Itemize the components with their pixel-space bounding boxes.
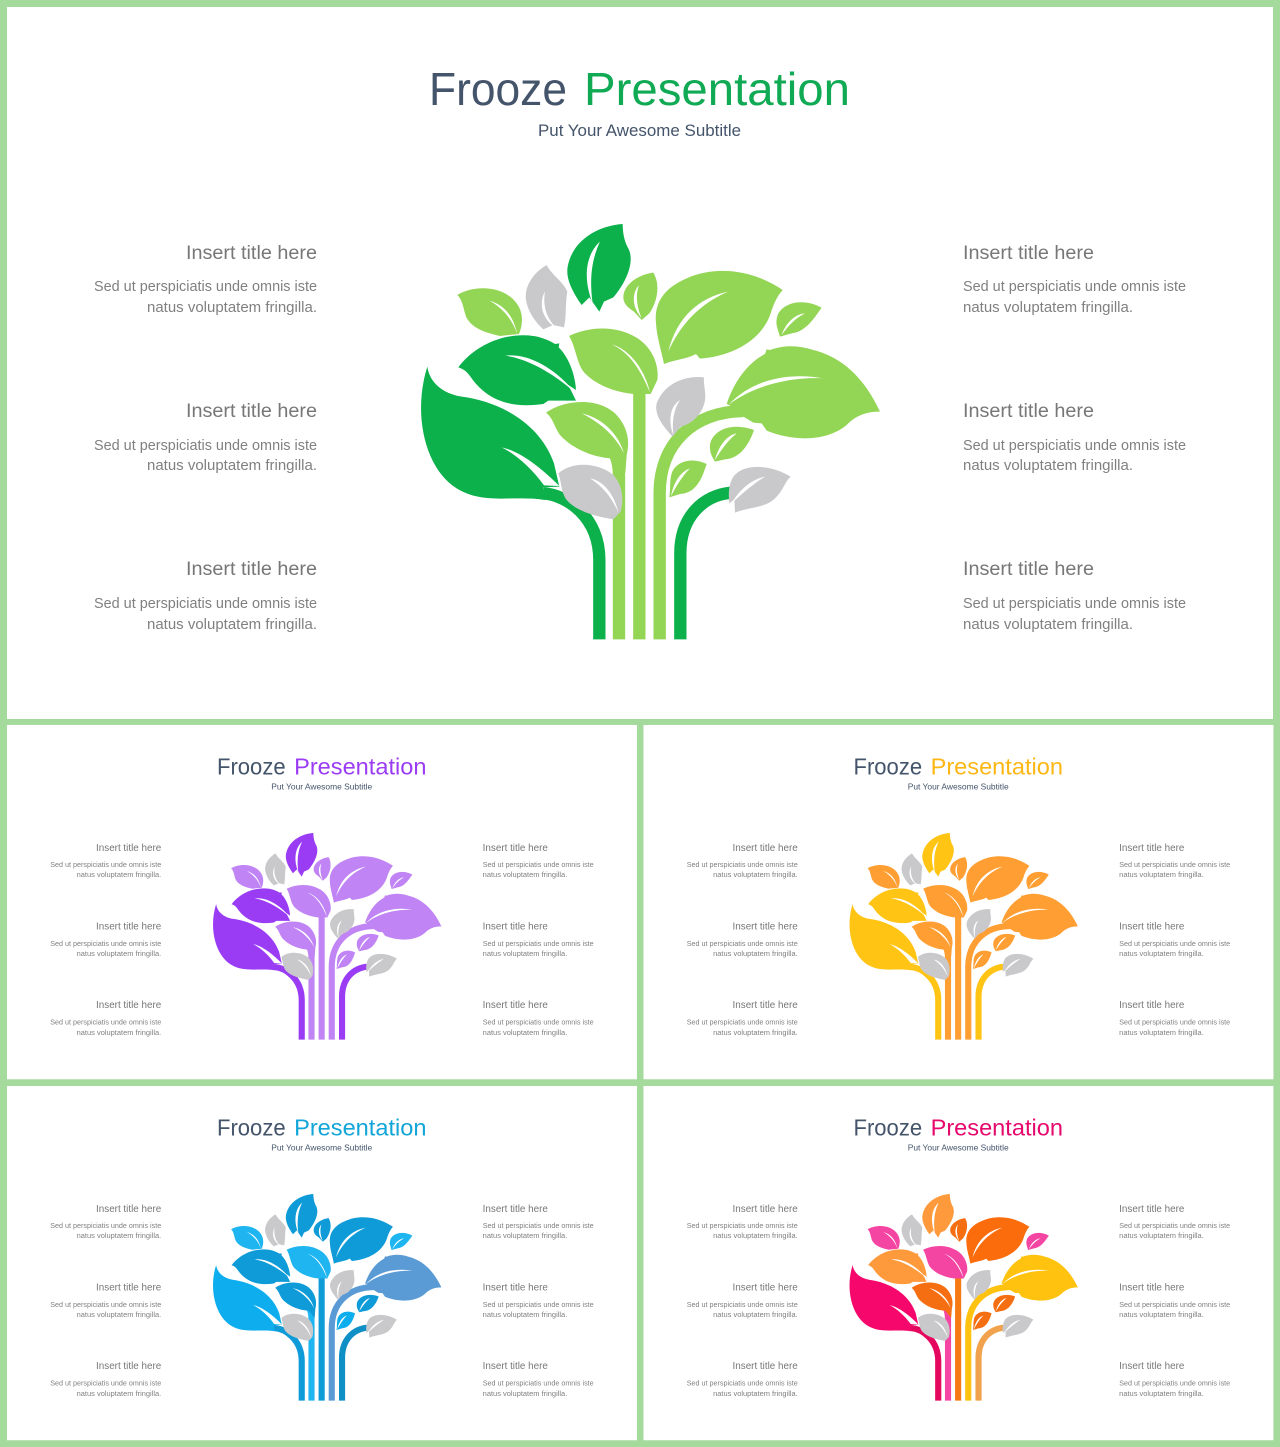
text blocks: Sed ut perspiciatis unde omnis iste	[50, 860, 161, 869]
text block: right 3	[963, 558, 1186, 633]
text blocks: Insert title here	[1119, 1204, 1184, 1215]
text blocks: Sed ut perspiciatis unde omnis iste	[483, 1300, 594, 1309]
text blocks: natus voluptatem fringilla.	[77, 949, 161, 958]
text block: right 1	[963, 242, 1186, 316]
text blocks: natus voluptatem fringilla.	[1119, 1389, 1204, 1398]
text blocks: Insert title here	[733, 843, 798, 854]
text blocks: natus voluptatem fringilla.	[483, 1310, 567, 1319]
text blocks: Insert title here	[483, 1361, 548, 1372]
leaf: light centre	[569, 328, 658, 394]
leaf: small light right	[776, 302, 822, 337]
leaf: small light top	[623, 273, 657, 320]
text blocks: Insert title here	[483, 1000, 548, 1011]
text blocks: Insert title here	[96, 1282, 161, 1293]
text blocks: natus voluptatem fringilla.	[77, 1231, 161, 1240]
panel: main green slide	[7, 7, 1273, 719]
text blocks: Sed ut perspiciatis unde omnis iste	[50, 1221, 161, 1230]
leaf: grey lower	[558, 465, 622, 519]
tree illustration: pink	[850, 1194, 1078, 1401]
leaf: big light top right	[656, 271, 783, 364]
text blocks: natus voluptatem fringilla.	[713, 870, 798, 879]
text blocks: Sed ut perspiciatis unde omnis iste	[687, 1300, 798, 1309]
text block: left 1	[94, 242, 317, 316]
leaf: top	[567, 224, 631, 312]
text blocks: natus voluptatem fringilla.	[483, 949, 567, 958]
title: Presentation	[294, 754, 426, 780]
leaf: large left	[421, 367, 559, 500]
text block: right 3: Sed ut perspiciatis unde omnis iste	[963, 596, 1186, 612]
text blocks: natus voluptatem fringilla.	[713, 1231, 798, 1240]
text blocks: Sed ut perspiciatis unde omnis iste	[483, 860, 594, 869]
title	[853, 1115, 1063, 1141]
text blocks	[50, 1204, 594, 1398]
subtitle: Put Your Awesome Subtitle	[538, 121, 741, 140]
title: Frooze	[853, 754, 922, 780]
text blocks: natus voluptatem fringilla.	[1119, 949, 1204, 958]
text blocks: Insert title here	[733, 1204, 798, 1215]
text block: left 3: Sed ut perspiciatis unde omnis iste	[94, 596, 317, 612]
text blocks: natus voluptatem fringilla.	[77, 1310, 161, 1319]
leaf: upper left	[458, 335, 576, 405]
leaf: largest right	[727, 346, 880, 438]
title	[429, 63, 850, 115]
text block: right 1: Insert title here	[963, 242, 1094, 264]
panel: purple slide	[7, 725, 637, 1079]
title	[853, 754, 1063, 780]
subtitle: Put Your Awesome Subtitle	[908, 1143, 1009, 1153]
text block: left 3	[94, 558, 317, 633]
text blocks: natus voluptatem fringilla.	[483, 1389, 567, 1398]
text blocks	[687, 1204, 1230, 1398]
text block: left 1: Insert title here	[186, 242, 317, 264]
text blocks: Sed ut perspiciatis unde omnis iste	[687, 1018, 798, 1027]
title	[217, 754, 426, 780]
text blocks: Insert title here	[1119, 843, 1184, 854]
text blocks: natus voluptatem fringilla.	[1119, 1310, 1204, 1319]
text blocks: Insert title here	[733, 1282, 798, 1293]
text blocks: Insert title here	[1119, 1000, 1184, 1011]
text blocks: natus voluptatem fringilla.	[1119, 1028, 1204, 1037]
text blocks: Sed ut perspiciatis unde omnis iste	[50, 939, 161, 948]
tree illustration: yellow	[850, 833, 1078, 1040]
text blocks: natus voluptatem fringilla.	[713, 1389, 798, 1398]
stems	[543, 387, 743, 639]
text block: right 3: Insert title here	[963, 558, 1094, 580]
leaf: small light low	[669, 460, 707, 497]
text blocks: Sed ut perspiciatis unde omnis iste	[687, 939, 798, 948]
text blocks: Insert title here	[1119, 921, 1184, 932]
text blocks: Sed ut perspiciatis unde omnis iste	[1119, 1379, 1230, 1388]
title: Presentation	[584, 63, 850, 115]
text blocks: Sed ut perspiciatis unde omnis iste	[483, 1018, 594, 1027]
panel: pink slide	[643, 1086, 1273, 1440]
text block: left 3: Insert title here	[186, 558, 317, 580]
text block: right 3: natus voluptatem fringilla.	[963, 617, 1133, 633]
text blocks: natus voluptatem fringilla.	[713, 949, 798, 958]
text blocks: natus voluptatem fringilla.	[1119, 870, 1204, 879]
text block: right 1: natus voluptatem fringilla.	[963, 300, 1133, 316]
title: Presentation	[294, 1115, 426, 1141]
text block: left 3: natus voluptatem fringilla.	[147, 617, 317, 633]
text block: left 1: Sed ut perspiciatis unde omnis iste	[94, 279, 317, 295]
title: Presentation	[931, 754, 1063, 780]
leaf: light lower centre	[546, 402, 628, 473]
text blocks: Insert title here	[733, 1361, 798, 1372]
subtitle: Put Your Awesome Subtitle	[271, 782, 373, 792]
text blocks: natus voluptatem fringilla.	[483, 1231, 567, 1240]
text blocks: Insert title here	[733, 921, 798, 932]
text block: right 2: Sed ut perspiciatis unde omnis iste	[963, 438, 1186, 454]
text blocks: Insert title here	[483, 921, 548, 932]
title: Frooze	[217, 754, 286, 780]
text block: right 2: Insert title here	[963, 400, 1094, 422]
text blocks: natus voluptatem fringilla.	[483, 1028, 567, 1037]
text blocks: Insert title here	[483, 1282, 548, 1293]
text blocks: Sed ut perspiciatis unde omnis iste	[1119, 1018, 1230, 1027]
text blocks: Insert title here	[483, 1204, 548, 1215]
subtitle: Put Your Awesome Subtitle	[271, 1143, 373, 1153]
text blocks: Sed ut perspiciatis unde omnis iste	[483, 1379, 594, 1388]
text block: left 1: natus voluptatem fringilla.	[147, 300, 317, 316]
leaf: grey top	[526, 265, 567, 329]
title: Frooze	[217, 1115, 286, 1141]
leaf: grey middle	[656, 377, 705, 437]
text blocks: Sed ut perspiciatis unde omnis iste	[687, 1379, 798, 1388]
text blocks: Sed ut perspiciatis unde omnis iste	[687, 860, 798, 869]
text blocks: Sed ut perspiciatis unde omnis iste	[50, 1379, 161, 1388]
text blocks: Sed ut perspiciatis unde omnis iste	[1119, 1221, 1230, 1230]
text blocks: Insert title here	[1119, 1282, 1184, 1293]
leaf: small light mid	[710, 427, 754, 462]
title: Presentation	[931, 1115, 1063, 1141]
text blocks: natus voluptatem fringilla.	[713, 1310, 798, 1319]
title: Frooze	[853, 1115, 922, 1141]
text blocks: Insert title here	[96, 1361, 161, 1372]
text blocks: natus voluptatem fringilla.	[77, 870, 161, 879]
leaf: grey right	[729, 467, 791, 513]
text blocks: Sed ut perspiciatis unde omnis iste	[1119, 939, 1230, 948]
text blocks: Sed ut perspiciatis unde omnis iste	[1119, 1300, 1230, 1309]
text blocks: Sed ut perspiciatis unde omnis iste	[483, 1221, 594, 1230]
text blocks: Insert title here	[733, 1000, 798, 1011]
text blocks	[50, 843, 594, 1037]
title: Frooze	[429, 63, 567, 115]
text block: right 1: Sed ut perspiciatis unde omnis iste	[963, 279, 1186, 295]
text block: left 2: Insert title here	[186, 400, 317, 422]
panel: yellow slide	[643, 725, 1273, 1079]
text block: left 2: Sed ut perspiciatis unde omnis iste	[94, 438, 317, 454]
text blocks: natus voluptatem fringilla.	[77, 1028, 161, 1037]
text blocks: Sed ut perspiciatis unde omnis iste	[50, 1018, 161, 1027]
tree illustration: purple	[213, 833, 441, 1040]
text blocks: natus voluptatem fringilla.	[713, 1028, 798, 1037]
text blocks: Sed ut perspiciatis unde omnis iste	[687, 1221, 798, 1230]
subtitle: Put Your Awesome Subtitle	[908, 782, 1009, 792]
text blocks: Insert title here	[96, 1204, 161, 1215]
text blocks: Sed ut perspiciatis unde omnis iste	[483, 939, 594, 948]
text block: left 2	[94, 400, 317, 474]
text blocks: natus voluptatem fringilla.	[483, 870, 567, 879]
text blocks: Insert title here	[96, 843, 161, 854]
text blocks: natus voluptatem fringilla.	[1119, 1231, 1204, 1240]
text blocks: Sed ut perspiciatis unde omnis iste	[1119, 860, 1230, 869]
text blocks: Insert title here	[96, 921, 161, 932]
text block: right 2: natus voluptatem fringilla.	[963, 458, 1133, 474]
tree illustration: green	[421, 224, 880, 639]
panel: blue slide	[7, 1086, 637, 1440]
text blocks: Insert title here	[483, 843, 548, 854]
text blocks: Insert title here	[96, 1000, 161, 1011]
text blocks	[687, 843, 1230, 1037]
title	[217, 1115, 426, 1141]
text block: left 2: natus voluptatem fringilla.	[147, 458, 317, 474]
text blocks: natus voluptatem fringilla.	[77, 1389, 161, 1398]
text blocks: Insert title here	[1119, 1361, 1184, 1372]
text block: right 2	[963, 400, 1186, 474]
tree illustration: blue	[213, 1194, 441, 1401]
leaf: light top left	[457, 288, 522, 336]
text blocks: Sed ut perspiciatis unde omnis iste	[50, 1300, 161, 1309]
